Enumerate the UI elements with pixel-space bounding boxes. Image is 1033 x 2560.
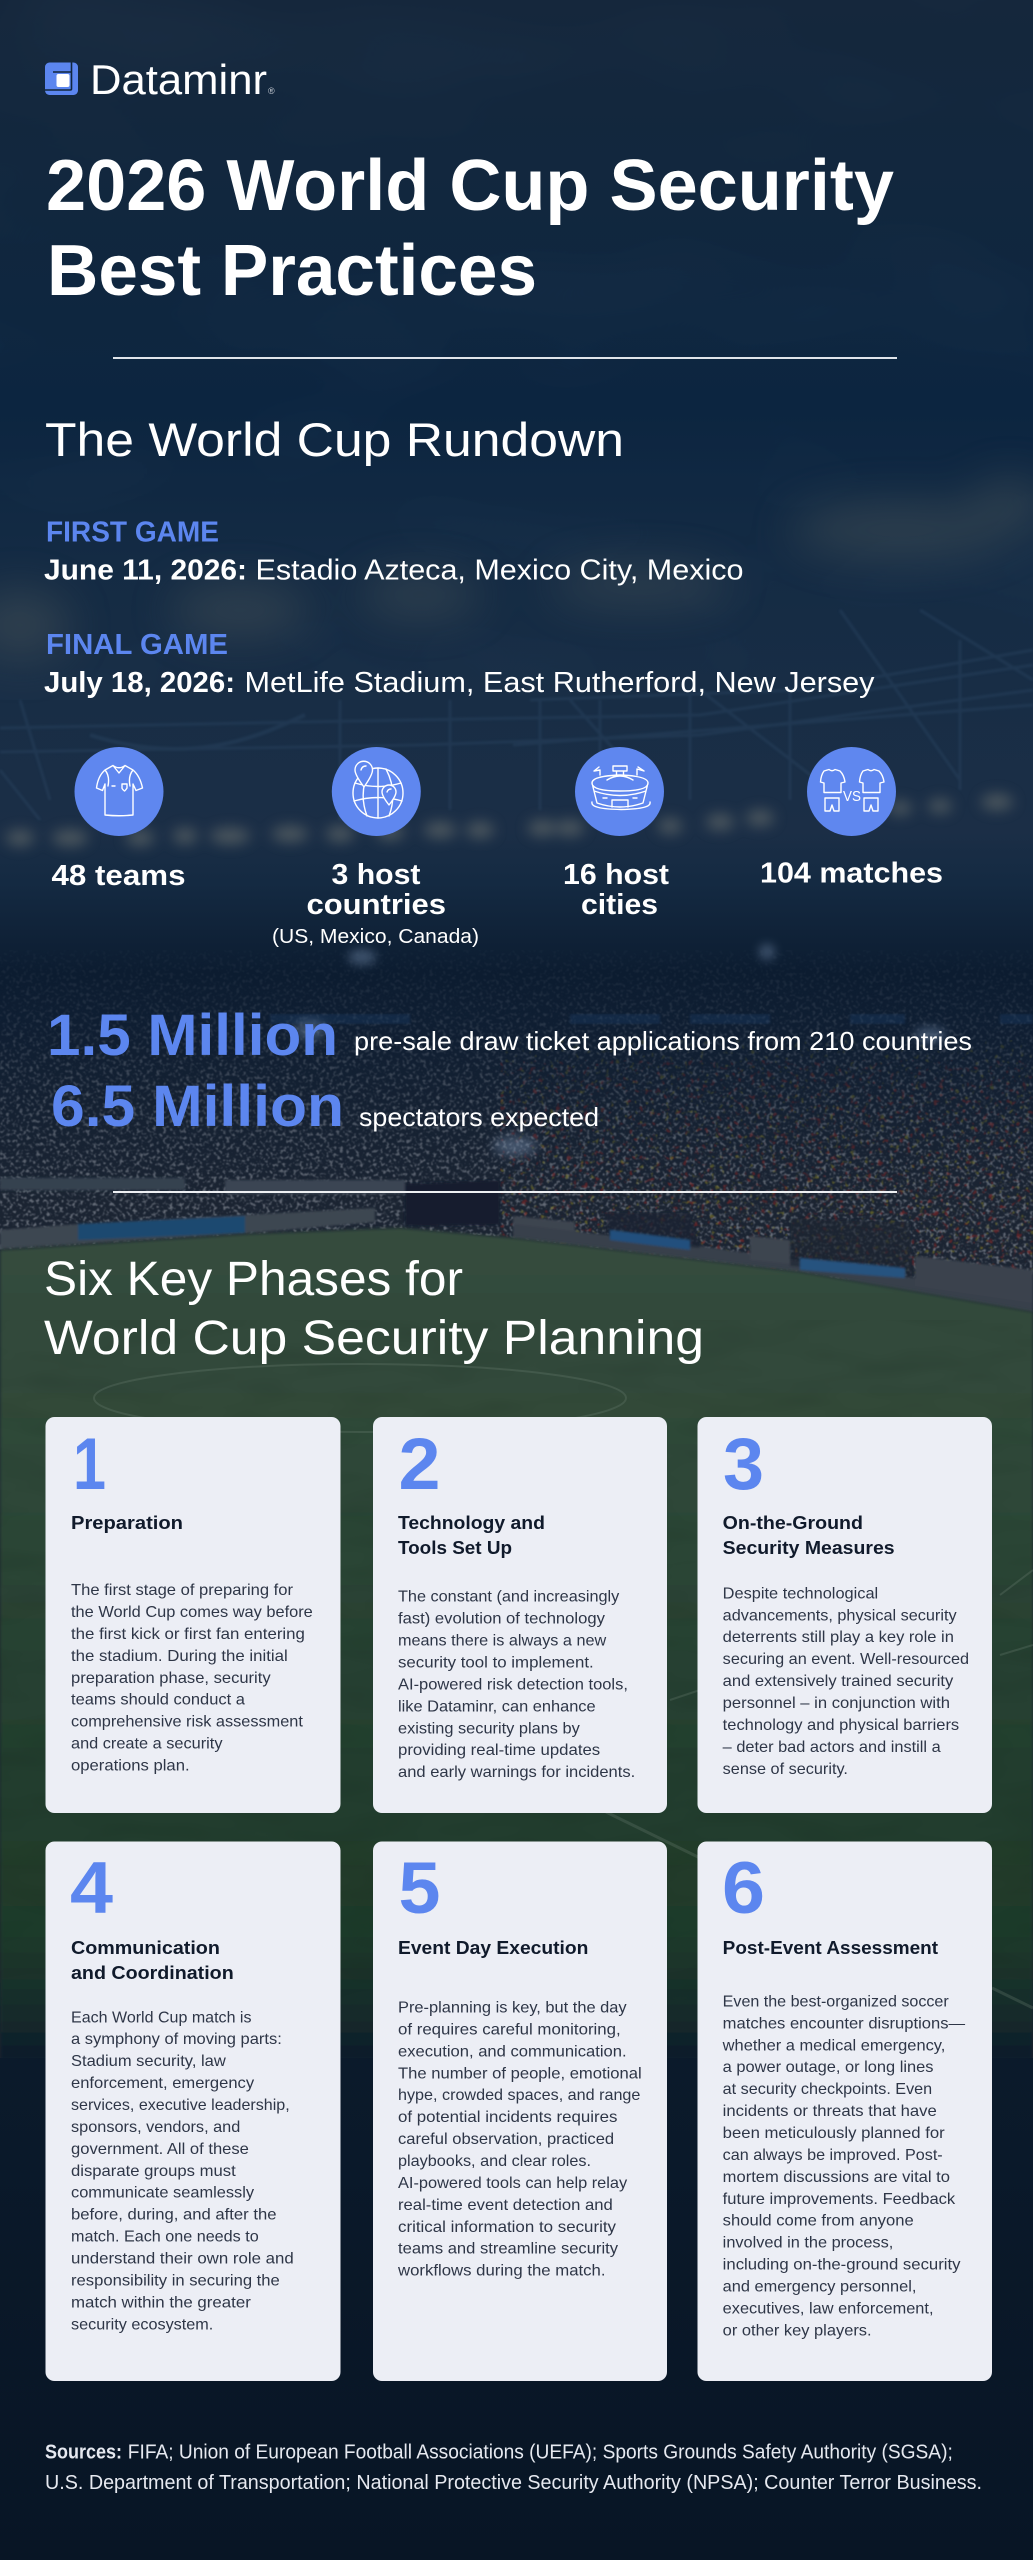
heading: and Coordination [71,1963,234,1983]
body text: sponsors, vendors, and [71,2119,240,2136]
body text: match. Each one needs to [71,2229,259,2246]
heading: The World Cup Rundown: The World Cup Rundown [45,413,624,466]
body text: personnel – in conjunction with [723,1695,950,1712]
final game block: July 18, 2026: [44,667,235,699]
body text: or other key players. [723,2322,872,2339]
first game block: June 11, 2026: [44,554,247,586]
body text [71,1582,313,1774]
heading [398,1513,545,1558]
number 6: 6 [722,1848,765,1929]
panel: phase 3 on-the-ground [698,1417,992,1813]
body text: careful observation, practiced [398,2131,614,2148]
title: 2026 World Cup Security [46,146,894,226]
body text: sense of security. [723,1761,848,1778]
body text: of potential incidents requires [398,2109,617,2126]
stat: 16 host cities: 16 host [563,859,669,891]
body text: the stadium. During the initial [71,1648,288,1665]
stat: 104 matches [760,747,943,890]
body text: responsibility in securing the [71,2272,280,2290]
body text: like Dataminr, can enhance [398,1698,596,1715]
panel: phase 1 preparation [46,1417,340,1813]
body text [397,2000,642,2280]
body text: The first stage of preparing for [71,1582,294,1599]
sources: U.S. Department of Transportation; National Protective Security Authority (NPSA); Counter Terror Business. [45,2472,982,2494]
stands walls [0,1178,1033,1312]
body text: operations plan. [71,1758,190,1774]
body text: should come from anyone [723,2213,914,2230]
body text: real-time event detection and [398,2197,613,2214]
stat: 3 host countries: (US, Mexico, Canada) [272,926,479,948]
heading [71,1938,234,1983]
body text: a power outage, or long lines [723,2059,934,2076]
number 1: 1 [73,1424,106,1505]
stat: 3 host countries: 3 host [332,859,421,891]
body text [71,2009,294,2333]
logo: Dataminr: ® [268,86,275,96]
title: Best Practices [47,231,537,311]
panel: phase 6 post-event assessment [698,1842,992,2381]
panel: phase 5 event day execution [373,1842,667,2381]
heading: six key phases: Six Key Phases for [44,1253,463,1306]
body text: future improvements. Feedback [723,2191,956,2208]
body text: including on-the-ground security [723,2257,960,2274]
final game block [44,629,875,699]
icon: two kits versus [807,747,896,836]
stat: 104 matches: 104 matches [760,858,943,890]
body text: technology and physical barriers [723,1717,959,1734]
body text: execution, and communication. [398,2043,627,2060]
body text: Pre-planning is key, but the day [398,2000,627,2016]
body text: preparation phase, security [71,1670,271,1687]
body text: at security checkpoints. Even [723,2081,932,2098]
stat: 16 host cities [563,747,669,921]
panel: phase 4 communication [46,1842,340,2381]
body text: and create a security [71,1736,222,1752]
stat: 6.5 million: spectators expected [359,1102,599,1132]
body text: The constant (and increasingly [398,1589,619,1606]
number 5: 5 [398,1848,440,1929]
icon: shirt [74,747,164,836]
body text: the first kick or first fan entering [71,1626,305,1643]
number 2: 2 [398,1424,440,1505]
body text: comprehensive risk assessment [71,1714,303,1731]
body text: and early warnings for incidents. [398,1764,635,1781]
body text [398,1589,635,1781]
heading: Event Day Execution [398,1938,588,1958]
body text: critical information to security [398,2219,616,2236]
body text: enforcement, emergency [71,2075,254,2092]
body text: of requires careful monitoring, [398,2021,621,2038]
body text: Stadium security, law [71,2053,226,2070]
body text: security tool to implement. [398,1654,594,1672]
sponsor banners and floodlight glows [270,944,1033,1156]
first game block: FIRST GAME [46,516,219,548]
body text: workflows during the match. [397,2263,606,2280]
body text: incidents or threats that have [723,2103,937,2120]
final game block: MetLife Stadium, East Rutherford, New Jersey [244,667,875,699]
body text: the World Cup comes way before [71,1604,313,1621]
stat: 48 teams [52,747,186,892]
body text: involved in the process, [723,2235,893,2252]
heading [723,1513,895,1558]
crowd [0,950,1033,1280]
first game block: Estadio Azteca, Mexico City, Mexico [256,554,744,586]
heading: Tools Set Up [398,1538,512,1558]
heading: Preparation [71,1513,183,1533]
number 3: 3 [723,1424,764,1505]
number 4: 4 [70,1848,113,1929]
stat: 1.5 million [47,1003,972,1068]
body text: Each World Cup match is [71,2009,252,2026]
sources: Sources: [45,2442,122,2464]
stat: 48 teams: 48 teams [52,860,186,892]
stat: 3 host countries [272,747,479,948]
sources [45,2442,982,2494]
body text: hype, crowded spaces, and range [398,2087,641,2104]
body text: existing security plans by [398,1720,580,1737]
heading: six key phases [44,1253,704,1365]
icon: two kits versus: VS [843,788,861,805]
heading: Post-Event Assessment [723,1938,938,1958]
body text: match within the greater [71,2294,252,2311]
heading: six key phases: World Cup Security Planning [44,1312,704,1365]
body text: Despite technological [723,1585,878,1602]
stat: 16 host cities: cities [581,889,658,921]
body text: security ecosystem. [71,2316,213,2333]
body text: teams and streamline security [398,2241,618,2258]
title [46,146,894,311]
body text: – deter bad actors and instill a [723,1739,941,1756]
body text: communicate seamlessly [71,2185,254,2202]
body text: means there is always a new [398,1633,607,1650]
body text: disparate groups must [71,2163,236,2180]
heading: Communication [71,1938,220,1958]
logo: Dataminr: Dataminr [90,56,267,103]
heading: Security Measures [723,1538,895,1558]
body text: advancements, physical security [723,1607,957,1624]
first game block [44,516,744,586]
body text: understand their own role and [71,2250,294,2268]
body text: Even the best-organized soccer [723,1993,949,2010]
sources: FIFA; Union of European Football Associations (UEFA); Sports Grounds Safety Authority (SGSA); [128,2442,953,2464]
body text: deterrents still play a key role in [723,1629,954,1646]
body text: and emergency personnel, [723,2278,916,2296]
body text: mortem discussions are vital to [723,2169,950,2186]
stat: 6.5 million [51,1074,599,1139]
body text: a symphony of moving parts: [71,2031,282,2048]
body text: providing real-time updates [398,1742,600,1759]
heading: On-the-Ground [723,1513,863,1533]
body text: AI-powered tools can help relay [398,2175,627,2192]
icon: stadium [575,747,664,836]
stat: 6.5 million: 6.5 Million [51,1074,344,1139]
body text: government. All of these [71,2141,249,2158]
pitch [0,1228,1033,2060]
panel: phase 2 technology and tools [373,1417,667,1813]
body text: matches encounter disruptions— [723,2015,965,2032]
body text: can always be improved. Post- [723,2147,943,2164]
stat: 1.5 million: pre-sale draw ticket applications from 210 countries [354,1026,972,1056]
body text: services, executive leadership, [71,2097,290,2114]
body text: teams should conduct a [71,1692,245,1709]
body text: and extensively trained security [723,1673,953,1690]
final game block: FINAL GAME [46,629,228,661]
body text: The number of people, emotional [398,2065,642,2082]
body text [722,1993,965,2339]
icon: globe with pins [332,747,421,836]
stat: 3 host countries: countries [306,889,446,921]
body text: whether a medical emergency, [722,2037,945,2054]
body text: before, during, and after the [71,2207,277,2224]
body text: executives, law enforcement, [723,2300,934,2317]
stat: 1.5 million: 1.5 Million [47,1003,338,1068]
body text: securing an event. Well-resourced [723,1651,969,1668]
body text [723,1585,969,1778]
body text: fast) evolution of technology [398,1611,605,1628]
body text: playbooks, and clear roles. [398,2153,591,2170]
body text: AI-powered risk detection tools, [398,1676,628,1693]
heading: Technology and [398,1513,545,1533]
body text: been meticulously planned for [723,2125,945,2142]
